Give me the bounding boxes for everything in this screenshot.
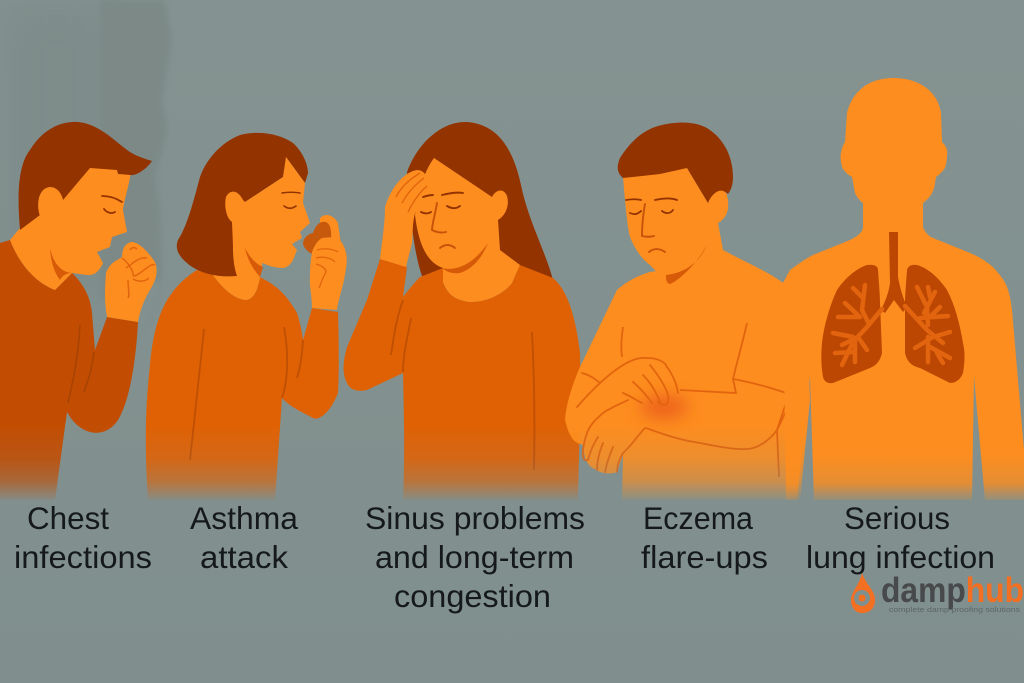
shirt — [344, 259, 580, 500]
eye and brow — [102, 196, 122, 213]
face — [225, 157, 310, 268]
hair — [177, 133, 308, 276]
label: sinus problems: Sinus problems — [365, 500, 585, 536]
inhaler — [303, 222, 331, 256]
figure: chest infections — [0, 122, 157, 500]
face and neck — [10, 160, 131, 290]
neck shadow — [50, 248, 72, 280]
label: eczema flare-ups — [641, 500, 768, 575]
figure: asthma attack — [146, 133, 347, 500]
logo droplet icon — [851, 573, 875, 613]
chin shadow — [442, 243, 488, 273]
hand on forehead — [380, 170, 428, 267]
label: sinus problems — [365, 500, 585, 614]
person scratching arm — [565, 122, 810, 500]
nose and mouth — [432, 203, 455, 248]
label: asthma attack: Asthma — [190, 500, 298, 536]
label: serious lung infection: Serious — [844, 500, 950, 536]
figure: eczema flare-ups — [565, 122, 810, 500]
lungs — [821, 232, 964, 383]
chin shadow — [666, 245, 707, 284]
nose and mouth — [642, 204, 665, 252]
label: eczema flare-ups: flare-ups — [641, 539, 768, 575]
neck shadow — [245, 248, 263, 277]
label: asthma attack: attack — [200, 539, 288, 575]
long hair — [407, 122, 553, 280]
brows and eyes — [626, 198, 677, 214]
label: chest infections — [14, 500, 152, 575]
face and neck — [415, 158, 520, 302]
trachea — [881, 232, 907, 313]
label: sinus problems: congestion — [394, 578, 551, 614]
label: chest infections: infections — [14, 539, 152, 575]
eye and brow — [282, 192, 300, 208]
hair — [618, 122, 733, 203]
person coughing — [0, 122, 157, 500]
neck — [213, 244, 262, 300]
clothing and arm outlines — [621, 308, 802, 477]
figure: serious lung infection — [783, 78, 1024, 500]
fist lines — [122, 248, 155, 298]
label: serious lung infection — [806, 500, 995, 575]
right bronchi — [905, 287, 950, 363]
label: chest infections: Chest — [27, 500, 109, 536]
figure: sinus problems — [344, 122, 580, 500]
label: eczema flare-ups: Eczema — [643, 500, 753, 536]
finger lines — [316, 249, 338, 288]
right lung — [905, 265, 964, 383]
label: sinus problems: and long-term — [375, 539, 574, 575]
left lung — [821, 265, 882, 383]
left bronchi — [833, 285, 882, 365]
person with inhaler — [146, 133, 347, 500]
thumb behind inhaler — [320, 215, 340, 240]
sleeve fold — [68, 325, 94, 403]
face and neck — [623, 168, 728, 283]
label: serious lung infection: lung infection — [806, 539, 995, 575]
finger lines — [396, 173, 427, 212]
logo: damphub — [851, 571, 1024, 614]
logo tagline: complete damp proofing solutions — [889, 605, 1020, 614]
person holding forehead — [344, 122, 580, 500]
shirt folds — [391, 300, 534, 470]
body — [565, 250, 810, 500]
hair — [19, 122, 152, 230]
label: asthma attack — [190, 500, 298, 575]
shirt — [146, 270, 339, 500]
scratching hand and forearm — [577, 358, 678, 472]
shirt folds — [190, 327, 303, 460]
hand — [310, 237, 347, 310]
ear — [708, 191, 728, 223]
fist — [105, 242, 157, 322]
ear — [38, 187, 63, 216]
closed eyes — [421, 193, 463, 214]
shirt — [0, 240, 138, 500]
silhouette — [783, 78, 1024, 500]
rash — [640, 395, 688, 419]
